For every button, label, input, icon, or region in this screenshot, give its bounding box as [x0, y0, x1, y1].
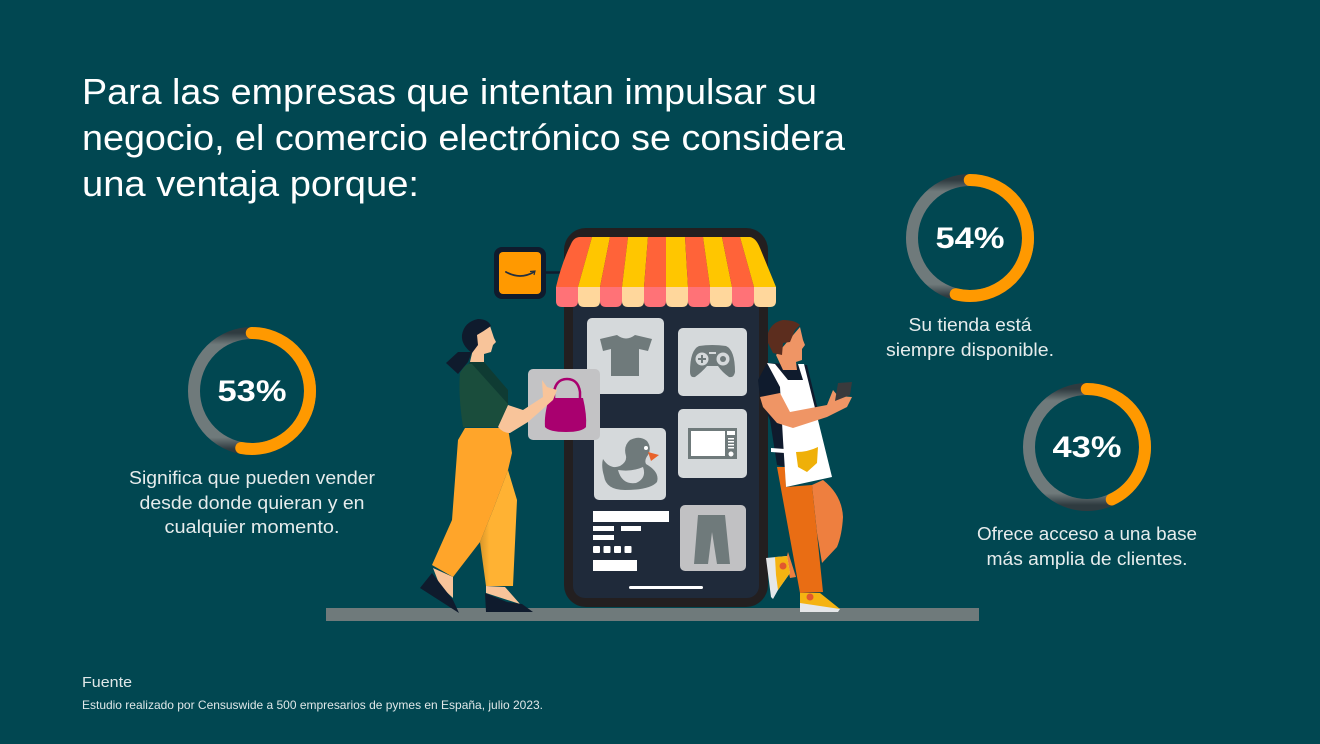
tile: trousers — [680, 505, 746, 571]
ring — [912, 180, 1028, 296]
description — [129, 468, 375, 537]
ground line — [326, 608, 979, 621]
tile: game controller — [678, 328, 747, 396]
source note — [82, 674, 543, 712]
hair — [462, 319, 491, 353]
value: 54% — [936, 222, 1004, 255]
illustration: man with phone — [758, 320, 852, 612]
title — [82, 71, 846, 204]
front leg — [777, 467, 823, 593]
stat: 54% — [886, 180, 1054, 360]
rear shoe — [766, 556, 790, 599]
apron — [767, 363, 832, 487]
title: negocio, el comercio electrónico se considera — [82, 117, 846, 158]
ponytail — [446, 352, 472, 374]
hair — [768, 320, 800, 355]
value: 43% — [1052, 431, 1122, 464]
held phone — [835, 382, 852, 401]
stat: 53% — [129, 333, 375, 537]
illustration: woman with bag — [420, 319, 557, 613]
shirt — [758, 363, 818, 467]
description — [977, 524, 1197, 569]
pocket — [796, 447, 818, 472]
description — [886, 315, 1054, 360]
source note: Fuente — [82, 674, 132, 691]
value: 53% — [218, 375, 286, 408]
shoes — [420, 573, 459, 613]
face and neck — [470, 326, 496, 362]
front leg trousers — [432, 428, 512, 577]
front shoe — [800, 593, 840, 612]
ring — [194, 333, 310, 449]
arm — [760, 390, 852, 428]
back leg trousers — [480, 470, 517, 586]
tile: microwave — [678, 409, 747, 478]
description: Ofrece acceso a una base — [977, 524, 1197, 544]
torso green — [460, 362, 508, 427]
rear leg — [812, 480, 843, 563]
neck and head — [776, 327, 805, 370]
description: más amplia de clientes. — [986, 549, 1188, 569]
description: cualquier momento. — [164, 517, 340, 537]
description: Su tienda está — [908, 315, 1033, 335]
ring — [1029, 389, 1145, 505]
tile: handbag — [528, 369, 600, 440]
tile: t-shirt — [587, 318, 664, 394]
source note: Estudio realizado por Censuswide a 500 empresarios de pymes en España, julio 2023. — [82, 698, 543, 712]
description: desde donde quieran y en — [140, 493, 364, 513]
stat: 43% — [977, 389, 1197, 569]
ankles — [433, 568, 453, 598]
phone body — [564, 228, 768, 607]
awning — [556, 237, 776, 307]
description: siempre disponible. — [886, 340, 1054, 360]
product text lines — [593, 511, 703, 589]
description: Significa que pueden vender — [129, 468, 375, 488]
title: Para las empresas que intentan impulsar su — [82, 71, 817, 112]
title: una ventaja porque: — [82, 163, 419, 204]
tile: rubber duck — [594, 428, 666, 500]
illustration: phone storefront — [556, 228, 776, 607]
icon: amazon logo badge — [494, 247, 562, 299]
arm and hand — [498, 380, 557, 433]
